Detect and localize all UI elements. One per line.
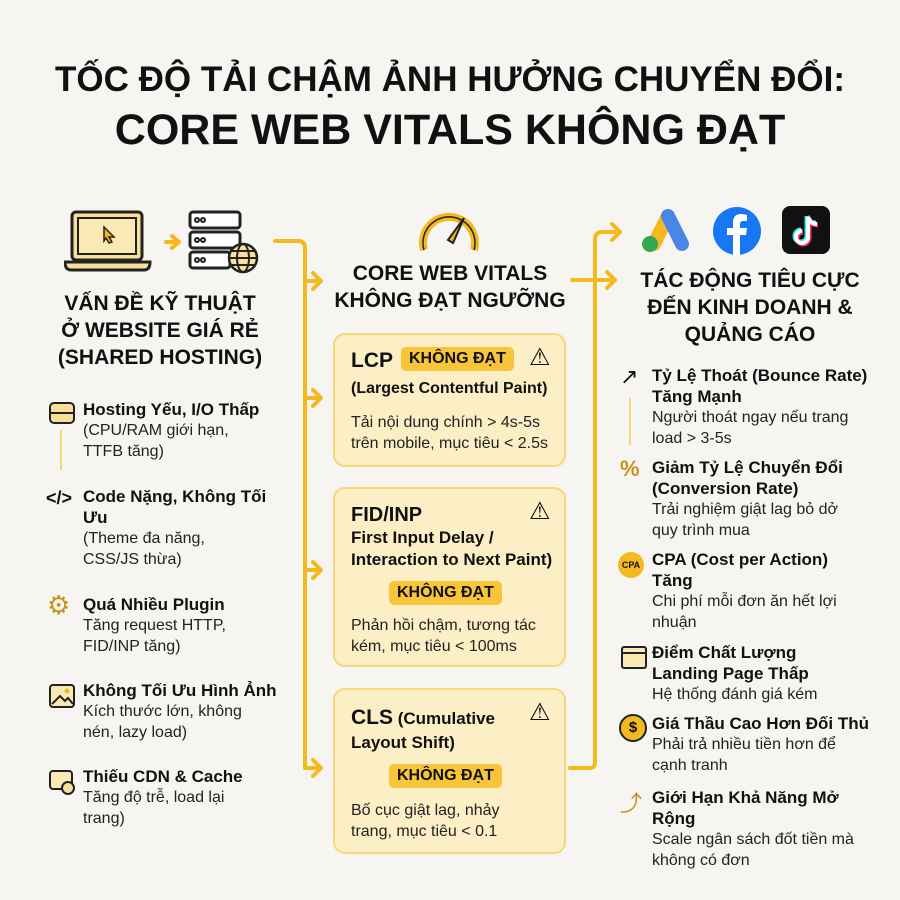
item: bounce: Người thoát ngay nếu trang <box>652 409 848 426</box>
icon: landing <box>621 646 647 669</box>
item: bid: Phải trả nhiều tiền hơn để <box>652 736 836 753</box>
item: plugin <box>83 595 226 655</box>
heading: center <box>334 262 566 312</box>
heading: right: TÁC ĐỘNG TIÊU CỰC <box>640 269 860 292</box>
heading: left: VẤN ĐỀ KỸ THUẬT <box>64 292 256 315</box>
card: FID/INP: Phản hồi chậm, tương tác <box>351 617 536 634</box>
heading: left: Ở WEBSITE GIÁ RẺ <box>61 319 259 342</box>
card: LCP: Tải nội dung chính > 4s-5s <box>351 414 540 431</box>
icon: server globe <box>188 210 258 274</box>
icon: hosting <box>49 402 75 424</box>
card: CLS <box>333 688 566 854</box>
item: conversion: Trải nghiệm giật lag bỏ dở <box>652 501 838 518</box>
item: code: CSS/JS thừa) <box>83 551 182 568</box>
icon: facebook <box>713 207 761 256</box>
card: LCP: ⚠ <box>529 344 551 371</box>
icon: dollar <box>619 714 647 742</box>
icon: scale: ⤴ <box>620 791 642 816</box>
heading: right: QUẢNG CÁO <box>685 323 815 346</box>
heading: right <box>640 268 860 346</box>
card: CLS: ⚠ <box>529 699 551 726</box>
title <box>55 59 845 154</box>
heading: left <box>58 290 262 369</box>
item: hosting: TTFB tăng) <box>83 443 164 460</box>
item: cdn <box>83 767 243 827</box>
icon: gauge <box>419 212 479 252</box>
item: bounce: Tỷ Lệ Thoát (Bounce Rate) Tăng Mạnh <box>652 366 867 406</box>
card: CLS: KHÔNG ĐẠT <box>397 767 494 784</box>
item: bid: Giá Thầu Cao Hơn Đối Thủ <box>652 714 869 733</box>
icon: CPA: CPA <box>622 560 640 570</box>
item: scale: Giới Hạn Khả Năng Mở <box>652 788 839 807</box>
icon: CPA <box>618 552 644 578</box>
card: CLS: CLS (Cumulative <box>351 706 495 729</box>
item: conversion <box>652 458 843 539</box>
heading: right: ĐẾN KINH DOANH & <box>647 296 853 319</box>
card: FID/INP: KHÔNG ĐẠT <box>397 584 494 601</box>
icon: code: </> <box>46 488 72 508</box>
title: CORE WEB VITALS KHÔNG ĐẠT <box>115 106 785 154</box>
item: cdn: Thiếu CDN & Cache <box>83 767 243 786</box>
item: scale: Scale ngân sách đốt tiền mà <box>652 831 854 848</box>
heading: center: CORE WEB VITALS <box>353 262 547 285</box>
item: landing <box>652 643 817 703</box>
title: TỐC ĐỘ TẢI CHẬM ẢNH HƯỞNG CHUYỂN ĐỔI: <box>55 60 845 99</box>
card: CLS: Layout Shift) <box>351 733 455 752</box>
card: FID/INP: kém, mục tiêu < 100ms <box>351 638 517 655</box>
icon: tiktok <box>782 206 830 254</box>
item: cdn: trang) <box>83 810 125 827</box>
item: images: Kích thước lớn, không <box>83 703 242 720</box>
item: bid <box>652 714 869 774</box>
icon: cdn <box>49 770 75 795</box>
item: conversion: Giảm Tỷ Lệ Chuyển Đổi (Conversion Rate) <box>652 458 843 498</box>
card: FID/INP <box>333 487 566 667</box>
item: code: Code Nặng, Không Tối Ưu <box>83 487 266 527</box>
card: LCP: LCP <box>351 349 393 372</box>
item: conversion: quy trình mua <box>652 522 750 539</box>
card: FID/INP: Interaction to Next Paint) <box>351 550 552 569</box>
item: scale: Rộng <box>652 809 695 828</box>
icon: laptop <box>64 210 152 272</box>
card: LCP: KHÔNG ĐẠT <box>409 350 506 367</box>
card: LCP: trên mobile, mục tiêu < 2.5s <box>351 435 548 452</box>
card: CLS: trang, mục tiêu < 0.1 <box>351 823 497 840</box>
item: landing: Landing Page Thấp <box>652 664 809 683</box>
item: scale <box>652 788 854 869</box>
icon: bounce: ↗ <box>620 364 638 389</box>
item: CPA: nhuận <box>652 614 696 631</box>
icon: gear: ⚙ <box>47 590 70 620</box>
item: bid: cạnh tranh <box>652 757 728 774</box>
item: CPA: Tăng <box>652 571 693 590</box>
icon: percent: % <box>620 456 640 481</box>
item: plugin: FID/INP tăng) <box>83 638 181 655</box>
icon: google ads <box>642 209 689 252</box>
item: CPA: CPA (Cost per Action) <box>652 550 828 569</box>
card: FID/INP: First Input Delay / <box>351 528 494 547</box>
item: hosting: Hosting Yếu, I/O Thấp <box>83 400 259 419</box>
item: scale: không có đơn <box>652 852 750 869</box>
item: CPA: Chi phí mỗi đơn ăn hết lợi <box>652 593 837 610</box>
item: code <box>83 487 266 568</box>
card: CLS: Bố cục giật lag, nhảy <box>351 802 500 819</box>
item: plugin: Quá Nhiều Plugin <box>83 595 225 614</box>
heading: center: KHÔNG ĐẠT NGƯỠNG <box>334 289 566 312</box>
item: images <box>83 681 276 741</box>
card: FID/INP: FID/INP <box>351 504 422 526</box>
heading: left: (SHARED HOSTING) <box>58 346 262 369</box>
item: hosting: (CPU/RAM giới hạn, <box>83 422 229 439</box>
item: bounce <box>652 366 867 447</box>
item: cdn: Tăng độ trễ, load lại <box>83 789 224 806</box>
item: bounce: load > 3-5s <box>652 430 732 447</box>
item: plugin: Tăng request HTTP, <box>83 617 226 634</box>
card: FID/INP: ⚠ <box>529 498 551 525</box>
item: CPA <box>652 550 837 631</box>
item: images: Không Tối Ưu Hình Ảnh <box>83 681 276 700</box>
icon: dollar: $ <box>629 719 637 736</box>
item: landing: Hệ thống đánh giá kém <box>652 686 817 703</box>
card: LCP: (Largest Contentful Paint) <box>351 380 547 397</box>
item: code: (Theme đa năng, <box>83 530 205 547</box>
icon: image <box>49 684 75 708</box>
card: LCP <box>333 333 566 467</box>
item: landing: Điểm Chất Lượng <box>652 643 796 662</box>
item: hosting <box>83 400 259 460</box>
item: images: nén, lazy load) <box>83 724 187 741</box>
